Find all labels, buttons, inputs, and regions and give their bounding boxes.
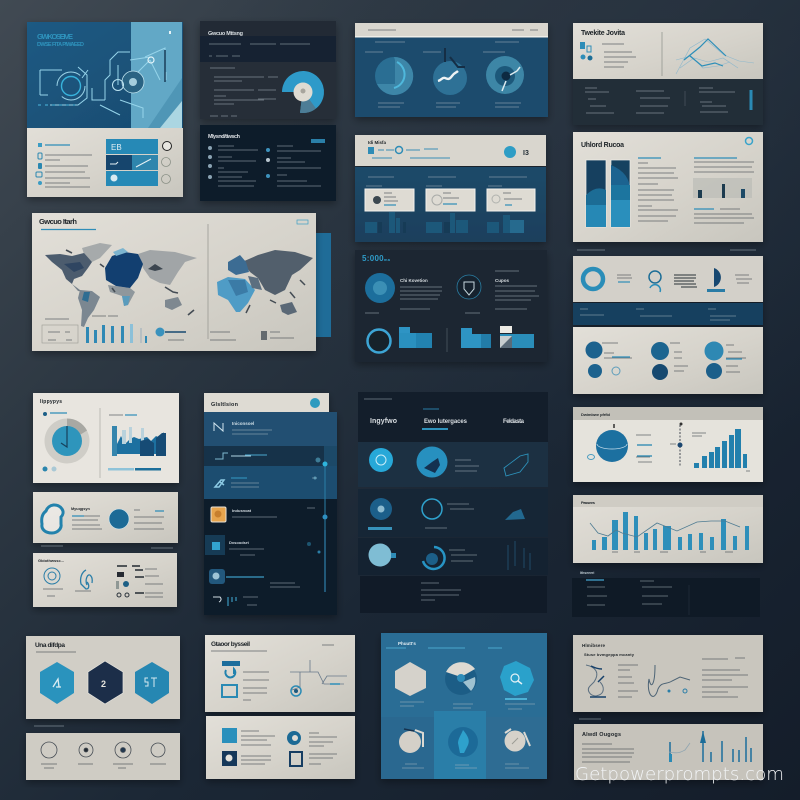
icon: search disc [500,661,534,700]
heading: grid columns: Ingyfwo [370,418,397,425]
icon: hexagon [395,662,426,696]
hexagon 1 [40,662,74,704]
heading: dark list title: Ithseeeri [580,571,594,575]
text block: trend footer [612,551,733,553]
text block: radial captions [365,42,521,107]
row 4 [211,507,315,522]
caption: top-right labels [577,249,756,251]
caption: curve note label [579,718,601,720]
donut chart [282,71,324,113]
panel: circle and bar chart [573,407,763,482]
icon: blue globe [588,424,652,462]
panel: vertical timeline [204,393,337,615]
row 7 [213,597,258,606]
row 1: Iniconsoel [232,421,254,426]
text block: hexagon subtitle [36,651,76,653]
map: left world [45,243,197,327]
heading: cover title: DWSE FITA PIWAEED [37,42,84,48]
heading: cards header: Idi Misfa [368,140,386,145]
heading: cover title [37,32,84,48]
hexagon 2: 2 [101,679,106,689]
icon: loop badge [42,505,63,533]
icon: pie [445,662,477,695]
icon: sheet badge [746,138,752,144]
heading: line icons title: Gbiothwssc... [38,558,64,563]
icons: squares [222,728,302,766]
text block: spiky copy [582,744,634,762]
text block: cover list [36,143,92,187]
row 5 [205,535,311,555]
icon row: top metrics [583,268,752,292]
caption: middle labels [41,546,173,548]
icon row: cards header [368,146,529,158]
radial chart 2 [433,48,467,95]
heading: dashboard title: Gwcuo Mttsng [208,31,243,37]
watermark: Getpowerprompts.com [575,764,784,785]
panel: curve note [573,635,763,712]
network text and icons [580,32,662,76]
panel: bars and line [573,495,763,563]
card 1 [365,189,414,211]
icon row: bottom metrics [586,342,746,380]
heading: cover title: GWKOSEIVE [37,32,73,41]
row 5: Dxsoodsrt [229,540,249,545]
icon: spiral [44,568,92,589]
area chart [100,408,166,478]
heading: grid columns: Ewo Iutergaces [424,419,468,425]
text block: bar chart note [670,433,750,471]
panel: circle outline icons [26,733,180,780]
text block: dashboard lines [209,44,310,116]
timeline track [318,462,328,592]
panel: process flow [205,635,355,712]
heading: map title: Gwcuo Itarh [39,217,77,226]
panel: square icons [206,716,355,779]
heading: process title: Gtaoor bysseil [211,641,250,648]
heading: trend title: Passees [581,500,596,505]
map: right world [208,224,313,339]
heading: dark title: 5:000ma [362,254,391,263]
row 6 [209,569,300,587]
text block: metric strip [580,309,736,320]
icons: outline circles [41,742,165,758]
cover bars [106,139,172,186]
text block: cards captions [366,177,527,186]
grid row 2 [358,489,548,537]
bar chart: trend columns [592,512,749,550]
card 3 [487,189,535,211]
icon: timeline badge [310,398,320,408]
text block: curve note copy [618,658,748,697]
line curves [586,665,690,697]
bar chart: spikes [669,731,751,762]
text block: round icons copy: Myuqgsyn [71,507,90,511]
text block: dark list lines [586,580,689,615]
heading: donut panel title: Iippypys [40,399,62,405]
panel: dark circles [355,250,547,362]
timeline dots [678,422,682,467]
row 4: Indusnoat [232,508,252,513]
panel: round icons [33,492,178,543]
grid row 3 [358,538,548,575]
line chart: trend overlay [590,521,740,537]
row 1 [204,412,337,446]
text block: dark copy [365,271,539,313]
text block: map subtitle [41,228,96,230]
text block: blue grid captions [400,702,535,768]
icons: process left [222,661,269,700]
icon: tag disc [504,729,530,752]
diagram: process right [290,660,347,696]
panel: dark grid [358,392,548,613]
icon: number circle [109,509,129,529]
text block: dark copy: Cupos [495,278,509,283]
ring [368,330,390,352]
text block: sheet copy [638,158,754,223]
text block: squares copy [241,731,337,764]
hexagon 3 [135,662,169,704]
panel: three blue radials [355,23,548,117]
text block: network dark strip [585,88,751,113]
caption: lower left label [34,725,64,727]
panel: spiky chart [574,724,763,780]
text block: round icons copy [71,507,164,529]
heading: curve note title: Hlmibsere [582,643,605,648]
heading: grid columns: Feldasta [503,419,525,425]
panel: world map [32,213,331,351]
icon row: cards header: I3 [523,150,529,157]
heading: second title: Mlysnd/tiwsch [208,134,241,140]
map legend [42,220,308,343]
icon: drop disc [448,727,478,757]
icon: face disc [399,729,423,753]
bar chart: ascending [694,429,747,468]
grid row 1 [358,442,548,487]
icon: circuit diagram [38,31,170,118]
heading: spiky title: Alwdl Ougogs [582,732,621,738]
bar chart: map stats [86,324,147,343]
heading: bar panel title: Dwimbwe pfrfid [581,412,611,417]
network chart [676,39,754,74]
panel: circle metrics [573,256,763,394]
map side strip [316,233,331,337]
panel: dark list [572,571,760,617]
heading: grid columns [364,399,525,429]
heading: blue grid title: Phuutt's [398,641,416,646]
panel: circuit cover [27,22,183,197]
bars under cards [365,212,524,233]
heading: network title: Twekite Jovita [581,30,625,37]
text block: lower list [208,146,321,186]
panel: dark donut dashboard [200,21,336,201]
radial chart 1 [375,57,413,95]
row 2 [204,446,337,466]
text block: dark copy: Chi Kovetion [400,278,428,283]
donut chart [42,412,90,472]
text block: line icons copy [43,566,163,597]
bar chart: tall columns [586,160,630,227]
heading: timeline title: Glsltlsion [211,402,239,408]
panel: column text sheet [573,132,763,242]
radial chart 3 [486,56,524,94]
panel: hexagons [26,636,180,719]
card 2 [426,189,475,211]
text block: radial header [368,29,538,31]
subheading: curve note: Stuse bvmgeppa mcanty [584,652,635,657]
panel: line icons [33,553,177,607]
blocks [399,326,534,352]
heading: hexagon title: Una difdpa [35,642,65,649]
tab rail [386,647,502,649]
hexagon 2 [88,661,123,704]
cover bars: EB [111,143,122,152]
panel: blue six-grid [381,633,547,779]
badge [311,139,325,143]
icon: target circle [365,273,481,303]
panel: donut and area chart [33,393,179,483]
text block: process subtitle [211,645,334,651]
heading: sheet title: Uhlord Rucoa [581,142,624,149]
row 3 [204,466,337,499]
text block: icon labels [41,764,166,768]
panel: three cards [355,135,546,242]
panel: network chart [573,23,763,125]
grid row 4 [360,576,547,613]
